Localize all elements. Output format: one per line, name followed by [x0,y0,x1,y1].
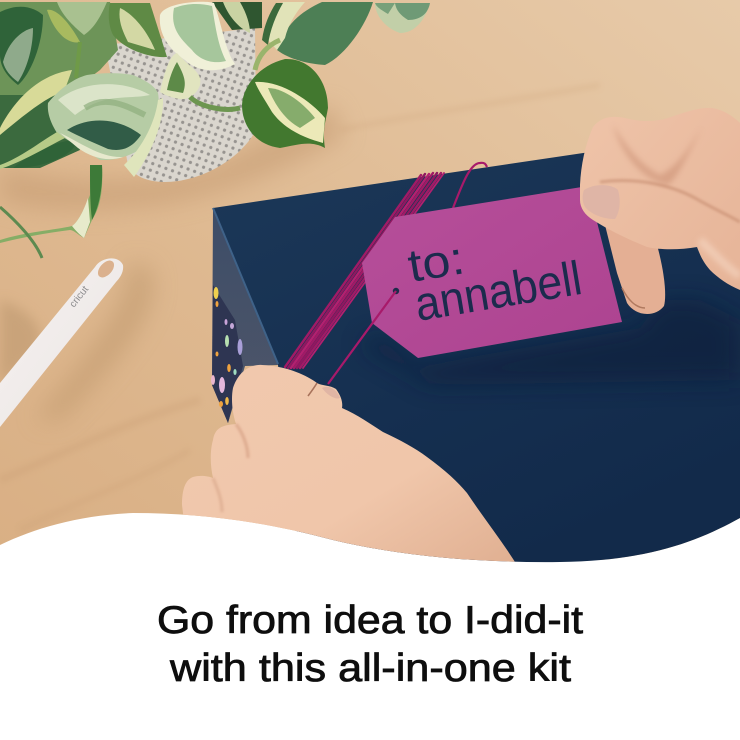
leaf stem [190,97,240,109]
leaf: dark lower [13,140,77,168]
leaf: top far right [375,3,430,33]
leaf: top right [262,2,373,65]
tag text: to: to: [404,231,468,292]
box side face [212,208,278,423]
finger gap [308,383,317,396]
right hand [580,108,740,290]
leaf: sliver top [223,2,250,33]
box top face [213,152,740,570]
tag text: annabell: annabell [411,252,586,332]
little finger shadow [213,478,222,512]
shadow under tag [426,303,736,382]
thumb crease [600,181,740,222]
thread loop [453,163,487,208]
thumbnail [583,185,620,219]
tag hole [393,288,399,294]
gift box [211,152,740,570]
plant foliage [0,2,430,258]
confetti pattern on box side [211,285,243,423]
stems to top right [255,40,280,70]
leaf: left cream [0,70,72,135]
hand shading [613,125,702,185]
plant pot [105,28,256,182]
gift tag [362,186,622,358]
finger crease [622,288,645,308]
right hand lower fingers [605,225,665,314]
left hand [182,365,520,570]
box ridge highlight [213,208,278,364]
leaf: round variegated [242,59,328,148]
stem [76,42,80,78]
caption [157,599,583,690]
leaf: pale sage [57,2,107,35]
leaf highlight [3,28,33,82]
leaf: big variegated [0,73,163,177]
wooden table [0,0,740,560]
caption line 1: Go from idea to I-did-it [157,599,583,642]
palm light [700,240,740,276]
leaf: top centre [160,2,235,70]
leaf: small centre [160,53,200,99]
leaf: upper left dark [0,7,43,85]
leaf: hanging bud [0,165,102,258]
purple thread bundle [285,173,444,368]
lower thread [328,291,396,384]
pen brand label: cricut [68,284,91,310]
leaf: olive [47,10,80,43]
caption line 2: with this all-in-one kit [169,647,571,690]
photo: hands tying a tag on a gift box [0,0,740,570]
knuckle shadow [236,424,248,458]
leaf: striped [109,3,167,57]
pen tool [0,258,123,427]
fingernail [322,387,340,399]
